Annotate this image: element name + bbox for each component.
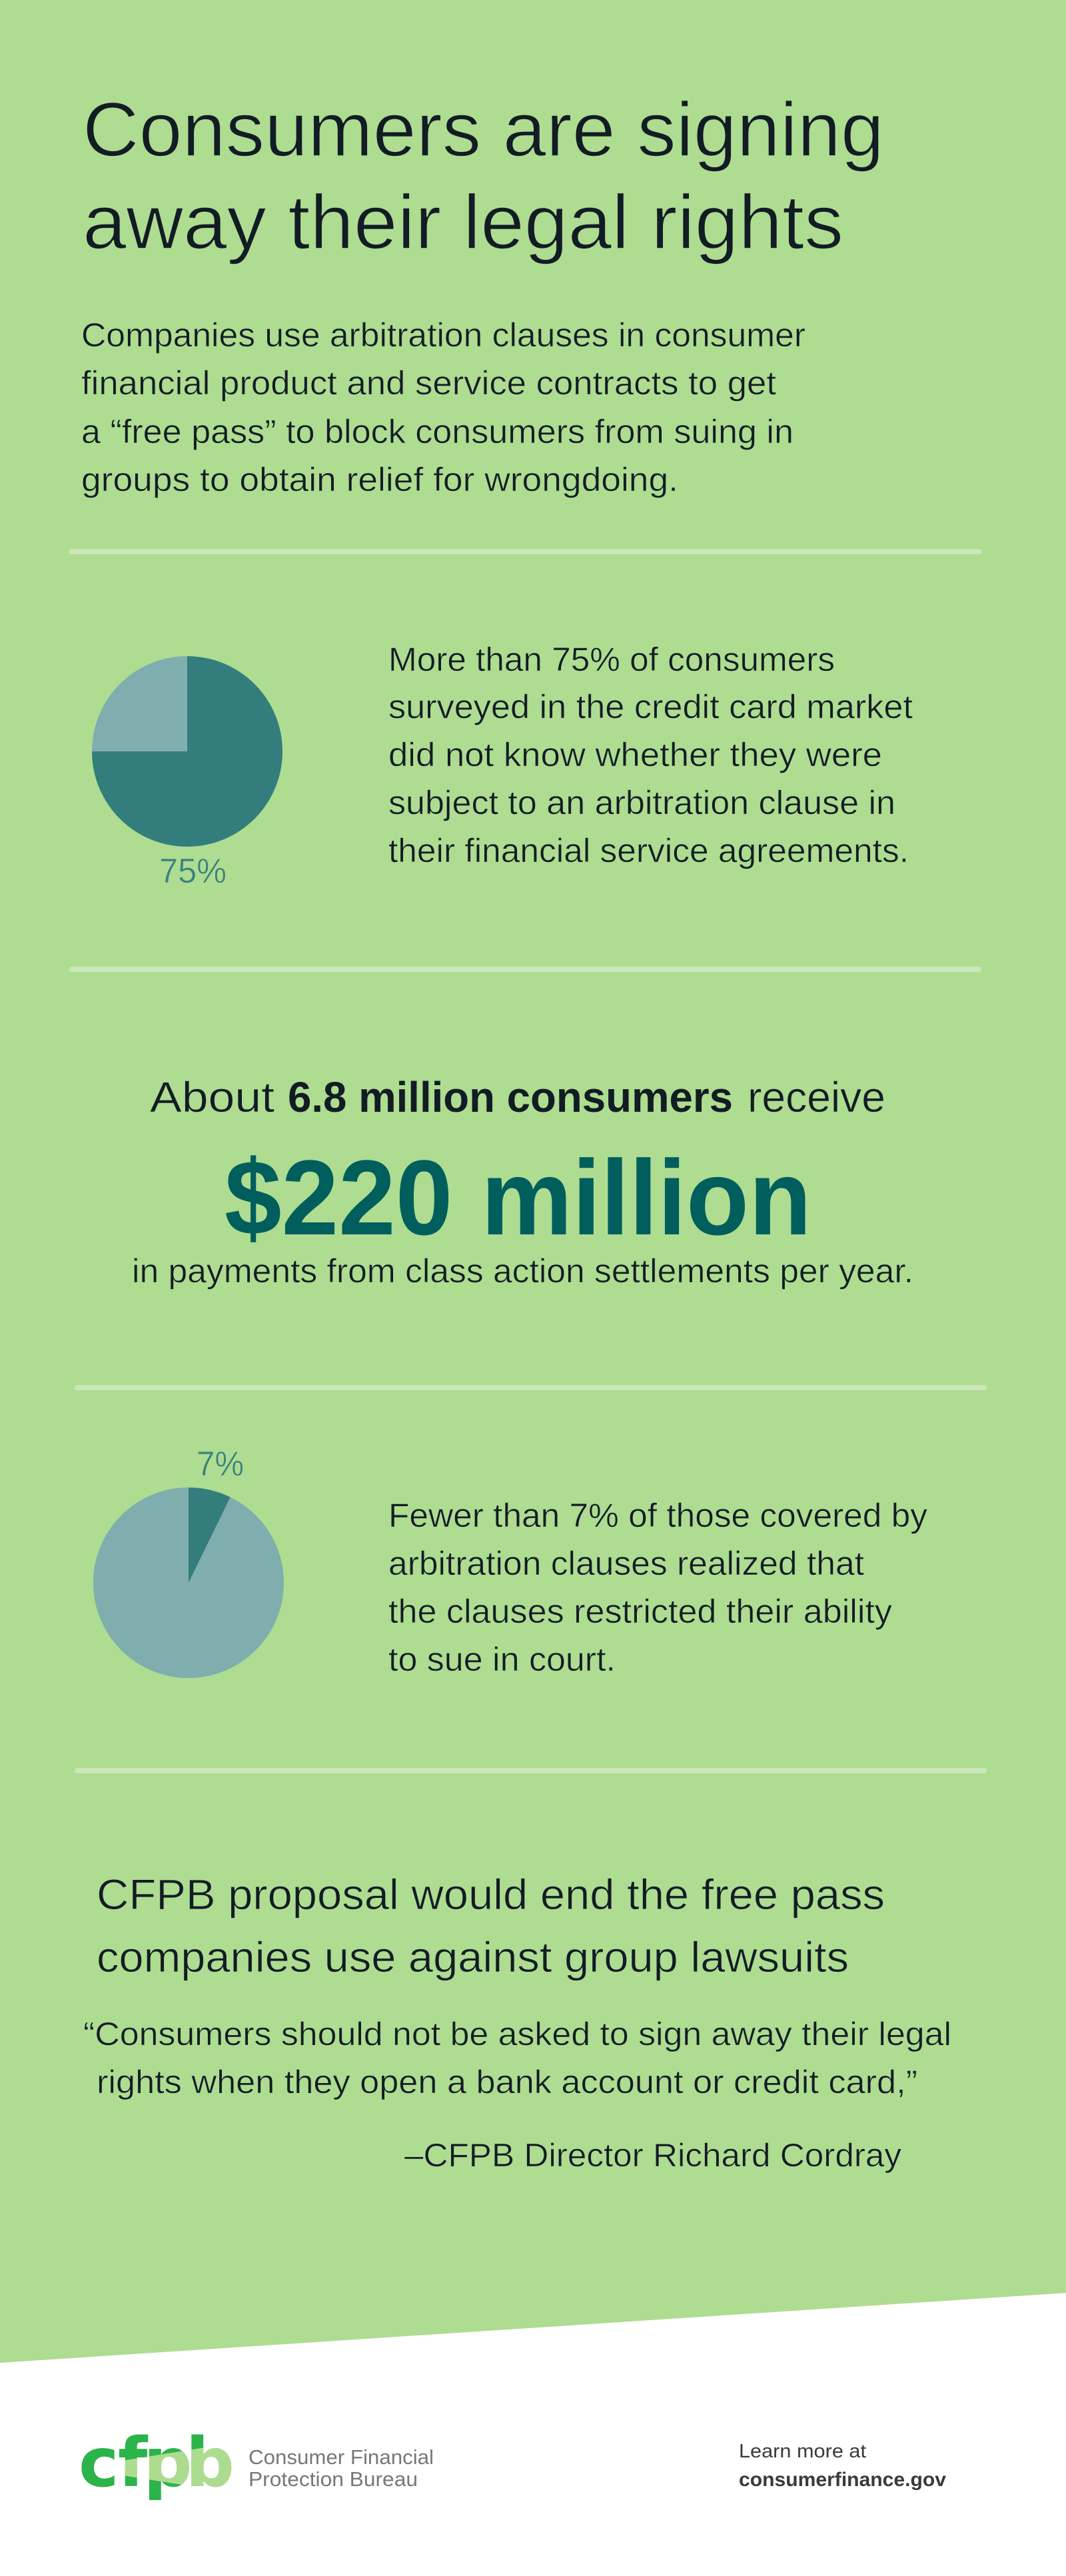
statistic: about 6.8 million consumers receive: receive <box>748 1073 885 1121</box>
quote attribution: –CFPB Director Richard Cordray <box>404 2138 902 2174</box>
title: away their legal rights <box>83 180 843 265</box>
logo wordmark: Consumer Financial Protection Bureau: Consumer Financial <box>249 2445 434 2469</box>
text block: 75% of consumers: their financial service agreements. <box>388 832 909 869</box>
logo: cfpb: cfpb <box>79 2423 235 2503</box>
intro text block: Companies use arbitration clauses in consumer <box>81 316 805 354</box>
text block: 75% of consumers <box>388 641 913 869</box>
quote <box>83 2016 951 2100</box>
quote: “Consumers should not be asked to sign away their legal <box>83 2016 951 2052</box>
text block: 75% of consumers: More than 75% of consumers <box>388 641 835 678</box>
title <box>83 87 884 265</box>
statistic: about 6.8 million consumers receive <box>150 1073 885 1121</box>
text block: fewer than 7%: to sue in court. <box>388 1641 616 1678</box>
pie chart: 75% <box>92 656 282 847</box>
pie label: 7%: 7% <box>197 1445 244 1484</box>
intro text block: groups to obtain relief for wrongdoing. <box>81 461 678 498</box>
heading: CFPB proposal: CFPB proposal would end the free pass <box>97 1871 885 1919</box>
learn more text <box>739 2441 946 2491</box>
heading: CFPB proposal <box>97 1871 885 1981</box>
learn more text: Learn more at <box>739 2441 866 2462</box>
quote: rights when they open a bank account or credit card,” <box>97 2064 917 2100</box>
intro text block <box>81 316 805 498</box>
text block: 75% of consumers: subject to an arbitration clause in <box>388 784 895 821</box>
pie chart: 7% <box>93 1488 284 1678</box>
text block: fewer than 7%: Fewer than 7% of those covered by <box>388 1497 927 1534</box>
statistic caption: in payments from class action settlements per year. <box>132 1252 913 1290</box>
statistic: about 6.8 million consumers receive: About <box>150 1073 274 1121</box>
text block: 75% of consumers: surveyed in the credit card market <box>388 688 913 725</box>
text block: 75% of consumers: did not know whether they were <box>388 736 882 773</box>
pie label: 75%: 75% <box>159 852 227 891</box>
logo wordmark: Consumer Financial Protection Bureau: Protection Bureau <box>249 2467 418 2491</box>
heading: CFPB proposal: companies use against group lawsuits <box>97 1933 849 1981</box>
learn more text: consumerfinance.gov <box>739 2469 946 2491</box>
intro text block: financial product and service contracts to get <box>81 364 776 402</box>
logo: cfpb: cfpb <box>79 2423 235 2503</box>
logo wordmark: Consumer Financial Protection Bureau <box>249 2445 434 2491</box>
text block: fewer than 7% <box>388 1497 927 1678</box>
title: Consumers are signing <box>83 87 884 173</box>
statistic: about 6.8 million consumers receive: 6.8 million consumers <box>288 1073 733 1121</box>
intro text block: a “free pass” to block consumers from suing in <box>81 413 794 450</box>
big number: $220 million: $220 million <box>225 1138 811 1257</box>
text block: fewer than 7%: the clauses restricted their ability <box>388 1593 892 1630</box>
text block: fewer than 7%: arbitration clauses realized that <box>388 1545 864 1582</box>
